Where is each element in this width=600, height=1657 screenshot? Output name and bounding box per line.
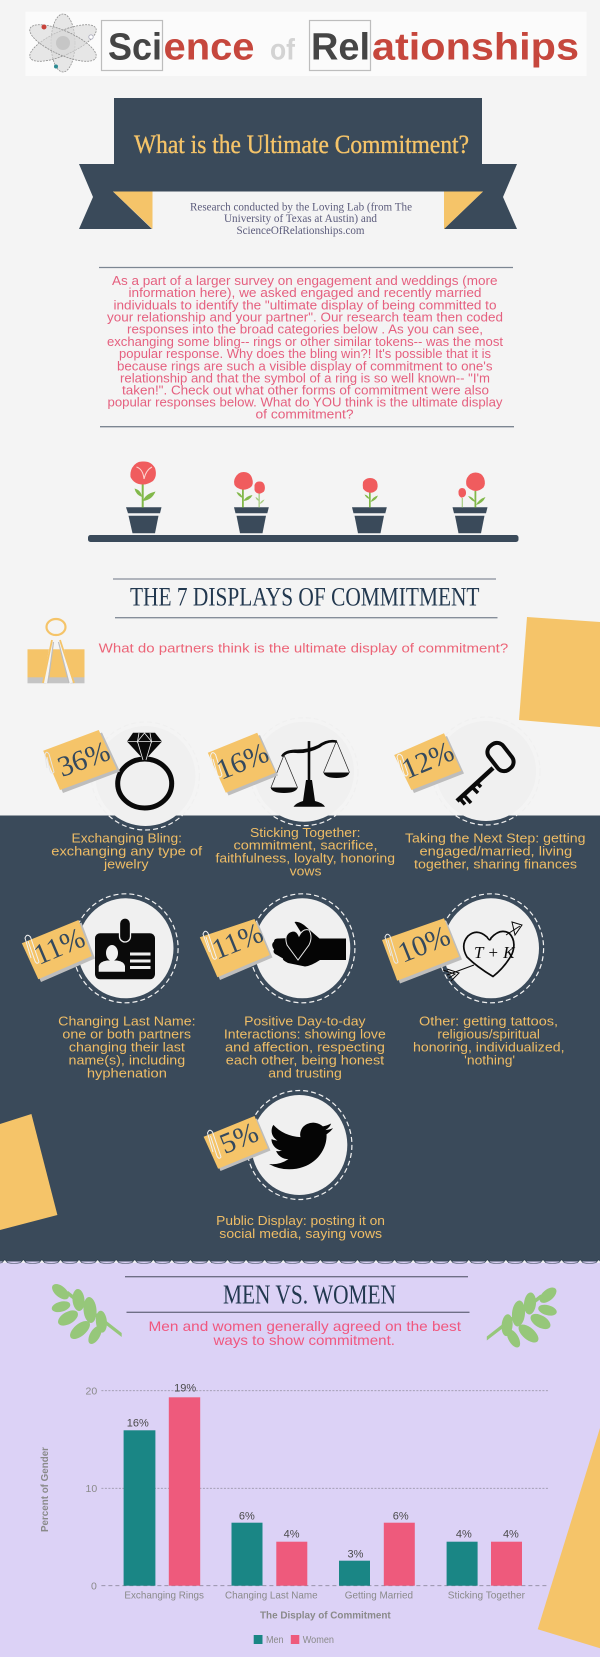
circle item: sticking together 16% — [208, 718, 358, 826]
x axis labels: Changing Last Name — [225, 1589, 318, 1601]
tag: 16%: 16% — [212, 737, 273, 786]
x axis title: The Display of Commitment — [260, 1610, 391, 1622]
circle item: other 10% — [382, 894, 544, 1003]
label: public display: social media, saying vows — [219, 1226, 383, 1241]
bar value labels: 4% — [284, 1528, 300, 1540]
tag: 10% — [382, 918, 462, 984]
icon: left laurel sprig — [49, 1281, 122, 1346]
text: men and women agreed: ways to show commitment. — [212, 1332, 395, 1348]
label: positive interactions: Positive Day-to-day — [244, 1014, 366, 1029]
illustration: potted roses on shelf — [88, 461, 518, 542]
label: sticking together: faithfulness, loyalty, honoring — [216, 850, 395, 865]
tag: 5%: 5% — [215, 1117, 263, 1161]
text: question: What do partners think is the ultimate display of commitment? — [99, 640, 508, 655]
logo: Science of Relationships: Sci — [108, 26, 162, 68]
label: public display: Public Display: posting it on — [216, 1213, 385, 1228]
tag: 16% — [208, 733, 278, 796]
intro text block: exchanging some bling-- rings or other similar tokens-- was the most — [107, 335, 504, 349]
icon: carved heart with arrow: T + K — [474, 943, 516, 962]
intro text block: popular responses below. What do YOU think is the ultimate display — [108, 396, 503, 410]
x axis labels: Getting Married — [345, 1589, 413, 1601]
bar value labels: 6% — [239, 1510, 255, 1522]
icon: binder clip — [28, 619, 84, 683]
label: sticking together: vows — [290, 863, 322, 878]
subtitle: research credit: ScienceOfRelationships.com — [236, 223, 365, 237]
subtitle: research credit — [190, 200, 412, 237]
label: changing last name: Changing Last Name: — [58, 1014, 196, 1029]
y axis title: Percent of Gender — [39, 1447, 51, 1532]
label: other: 'nothing' — [464, 1052, 515, 1067]
label: taking the next step: together, sharing finances — [414, 856, 578, 871]
label: changing last name: changing their last — [69, 1039, 185, 1054]
logo: Science of Relationships: ationships — [372, 26, 579, 68]
subtitle: research credit: University of Texas at Austin) and — [224, 211, 377, 225]
decorative gold note left — [0, 1114, 57, 1230]
bar value labels: 4% — [456, 1528, 472, 1540]
bar value labels — [127, 1383, 519, 1560]
label: changing last name: name(s), including — [68, 1052, 185, 1067]
bar value labels: 16% — [127, 1418, 149, 1430]
tag: 5% — [204, 1116, 270, 1171]
label: exchanging bling: Exchanging Bling: — [72, 831, 182, 846]
decorative gold note top right — [519, 617, 600, 727]
subtitle: research credit: Research conducted by the Loving Lab (from The — [190, 200, 412, 214]
tag: 11%: 11% — [207, 917, 268, 966]
icon: key — [457, 740, 517, 804]
intro text block: relationship and that the symbol of a ring is so well known-- "I'm — [120, 371, 490, 385]
bar value labels: 4% — [503, 1528, 519, 1540]
intro text block: As a part of a larger survey on engagement and weddings (more — [112, 274, 498, 288]
intro text block: of commitment? — [256, 408, 354, 422]
tag: 11%: 11% — [29, 922, 90, 972]
bar value labels: 19% — [174, 1383, 196, 1395]
label: public display — [216, 1213, 385, 1241]
title banner — [79, 98, 517, 229]
icon: right laurel sprig — [487, 1285, 559, 1350]
icon: rose pot 1 — [126, 461, 162, 533]
logo: Science of Relationships: ence — [164, 26, 254, 68]
label: other: Other: getting tattoos, — [419, 1014, 558, 1029]
icon: rose pot 4 — [452, 472, 488, 533]
text: men and women agreed: Men and women generally agreed on the best — [148, 1318, 461, 1334]
label: sticking together: Sticking Together: — [250, 825, 360, 840]
intro text block: your relationship and your partner". Our research team then coded — [107, 310, 503, 324]
decorative gold shape right — [538, 1428, 600, 1648]
label: other — [413, 1014, 564, 1067]
panel: dark displays section — [0, 816, 600, 1262]
intro text block: because rings are such a visible display of commitment to one's — [117, 359, 492, 373]
legend — [254, 1634, 334, 1646]
label: changing last name — [58, 1014, 196, 1080]
intro text block: responses into the broad categories below . As you can see, — [127, 323, 483, 337]
intro text block: information here), we asked engaged and recently married — [128, 286, 482, 300]
icon: hand holding heart — [272, 922, 346, 966]
label: positive interactions: each other, being honest — [226, 1052, 385, 1067]
icon: atom — [25, 14, 101, 72]
intro text block: individuals to identify the "ultimate display of being committed to — [114, 298, 497, 312]
intro text block: popular response. Why does the bling win?! It's possible that it is — [119, 347, 491, 361]
icon: rose pot 3 — [352, 478, 387, 533]
text: men and women agreed — [148, 1318, 461, 1348]
circle item: positive interactions 11% — [200, 894, 355, 1003]
x axis labels: Sticking Together — [448, 1589, 525, 1601]
label: exchanging bling: jewelry — [103, 856, 149, 871]
logo: Science of Relationships — [25, 12, 587, 76]
tag: 36% — [43, 730, 120, 793]
bar value labels: 6% — [393, 1510, 409, 1522]
title text: What is the Ultimate Commitment? — [134, 130, 469, 159]
icon: id badge — [95, 918, 155, 979]
legend: Men — [266, 1634, 284, 1646]
tag: 11% — [22, 920, 95, 982]
x axis labels: Exchanging Rings — [124, 1589, 204, 1601]
tag: 36%: 36% — [53, 735, 114, 784]
label: sticking together: commitment, sacrifice, — [234, 838, 378, 853]
label: other: religious/spiritual — [437, 1027, 540, 1042]
tag: 12%: 12% — [397, 736, 459, 786]
label: exchanging bling: exchanging any type of — [51, 843, 203, 858]
tag: 10%: 10% — [393, 920, 455, 969]
label: taking the next step — [405, 831, 586, 871]
bar value labels: 3% — [348, 1548, 364, 1560]
panel: purple men vs women section — [0, 1258, 600, 1657]
x axis labels — [124, 1589, 525, 1601]
label: positive interactions: and affection, respecting — [225, 1039, 385, 1054]
icon: rose pot 2 — [234, 472, 269, 533]
label: positive interactions — [224, 1014, 386, 1080]
bar chart: men vs women: 0 — [91, 1580, 97, 1592]
bar chart: men vs women: 10 — [86, 1483, 97, 1495]
intro text block — [99, 268, 514, 427]
bar chart: men vs women: 20 — [86, 1386, 97, 1398]
label: changing last name: one or both partners — [62, 1027, 192, 1042]
icon: balance scale — [271, 740, 350, 807]
intro text block: taken!". Check out what other forms of commitment were also — [122, 383, 489, 397]
tag: 11% — [200, 917, 272, 980]
bars: men — [124, 1430, 478, 1586]
label: sticking together — [216, 825, 395, 878]
logo: Science of Relationships: Rel — [311, 26, 370, 68]
heading: men vs women: MEN VS. WOMEN — [223, 1279, 396, 1309]
bars: women — [169, 1397, 522, 1586]
circle item: public display 5% — [204, 1090, 352, 1200]
bar chart: men vs women — [39, 1383, 549, 1646]
heading: the 7 displays of commitment: THE 7 DISPLAYS OF COMMITMENT — [130, 582, 480, 611]
circle item: changing last name 11% — [22, 894, 178, 1003]
icon: carved heart with arrow — [443, 922, 522, 981]
legend: Women — [303, 1634, 334, 1646]
label: positive interactions: and trusting — [268, 1065, 342, 1080]
label: taking the next step: engaged/married, living — [420, 843, 572, 858]
label: taking the next step: Taking the Next Step: getting — [405, 831, 586, 846]
label: other: honoring, individualized, — [413, 1039, 564, 1054]
label: exchanging bling — [51, 831, 203, 871]
circle item: taking the next step 12% — [394, 717, 540, 825]
label: positive interactions: Interactions: showing love — [224, 1027, 386, 1042]
icon: diamond ring — [118, 733, 172, 808]
label: changing last name: hyphenation — [87, 1065, 167, 1080]
circle item: exchanging bling 36% — [43, 722, 199, 830]
icon: twitter bird — [269, 1123, 333, 1169]
logo: Science of Relationships: of — [270, 33, 296, 66]
